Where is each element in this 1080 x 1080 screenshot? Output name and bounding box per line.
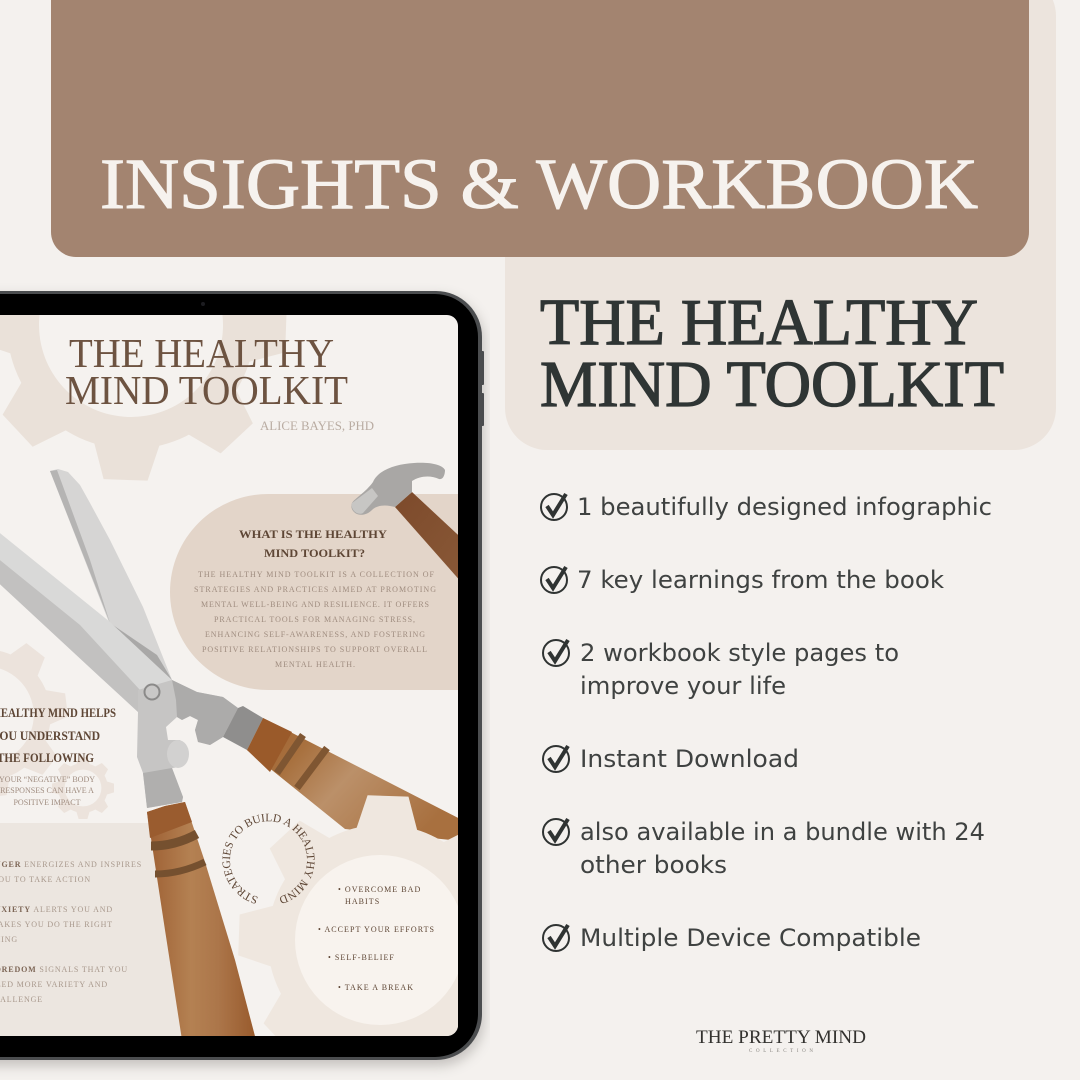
- shears grip collar: [143, 768, 183, 808]
- shears lower blade: [0, 525, 172, 715]
- left subheading: YOUR “NEGATIVE” BODY: [0, 775, 95, 784]
- banner heading: INSIGHTS & WORKBOOK: [100, 144, 978, 224]
- pill body text: THE HEALTHY MIND TOOLKIT IS A COLLECTION OF: [198, 570, 435, 579]
- pill body text: STRATEGIES AND PRACTICES AIMED AT PROMOTING: [194, 585, 436, 594]
- strategies list: [318, 885, 435, 992]
- illustration: shears: [0, 469, 470, 1040]
- pill body text: POSITIVE RELATIONSHIPS TO SUPPORT OVERALL: [202, 645, 427, 654]
- shears ferrule: [223, 706, 263, 750]
- checklist: [541, 493, 992, 952]
- strategies list: • OVERCOME BAD: [338, 885, 421, 894]
- left gear: [0, 643, 68, 796]
- lower right gear: [238, 795, 458, 1036]
- tablet camera: [201, 302, 205, 306]
- item 3: [543, 639, 899, 700]
- tablet screen: [0, 315, 458, 1036]
- shears upper blade: [50, 469, 172, 695]
- pill heading: [239, 530, 387, 557]
- left heading: [0, 706, 116, 765]
- logo: COLLECTION: [749, 1049, 813, 1054]
- gear inner circle: [295, 855, 465, 1025]
- item 3: 2 workbook style pages to: [580, 639, 899, 667]
- screen title: MIND TOOLKIT: [65, 367, 348, 413]
- screen title: [66, 340, 348, 405]
- item 5: also available in a bundle with 24: [580, 818, 985, 846]
- pill body text: MENTAL WELL-BEING AND RESILIENCE. IT OFFERS: [201, 600, 429, 609]
- heading: the healthy mind toolkit: THE HEALTHY: [540, 286, 978, 359]
- heading: the healthy mind toolkit: MIND TOOLKIT: [540, 348, 1004, 421]
- emotions text: [0, 860, 142, 1004]
- left heading: THE FOLLOWING: [0, 751, 94, 765]
- item 4: Instant Download: [580, 745, 799, 773]
- curved heading: strategies: STRATEGIES TO BUILD A HEALTHY MIND: [222, 814, 315, 904]
- tablet side buttons: [480, 351, 484, 426]
- left subheading: RESPONSES CAN HAVE A: [0, 786, 94, 795]
- pill body text: PRACTICAL TOOLS FOR MANAGING STRESS,: [214, 615, 415, 624]
- shears right handle: [247, 718, 470, 842]
- panel: lower left emotions: [0, 823, 190, 1036]
- tablet shadow: [0, 296, 484, 1066]
- strategies list: • ACCEPT YOUR EFFORTS: [318, 925, 435, 934]
- shears pivot pin: [144, 684, 160, 700]
- banner: [51, 0, 1029, 257]
- strategies list: • TAKE A BREAK: [338, 983, 414, 992]
- panel: what is the toolkit pill: [170, 494, 470, 690]
- screen title: THE HEALTHY: [69, 330, 334, 376]
- left subheading: [0, 776, 95, 805]
- strategies list: HABITS: [345, 897, 380, 906]
- left subheading: POSITIVE IMPACT: [13, 798, 81, 807]
- item 2: 7 key learnings from the book: [577, 566, 944, 594]
- shears knob: [167, 740, 189, 768]
- pill body text: [194, 570, 436, 669]
- heading: the healthy mind toolkit: [540, 286, 1004, 421]
- item 5: other books: [580, 851, 727, 879]
- screen author: ALICE BAYES, PHD: [260, 418, 374, 433]
- shears lower handle: [147, 802, 256, 1040]
- large gear: [0, 315, 286, 480]
- logo: THE PRETTY MIND: [696, 1027, 866, 1048]
- tablet bezel: [0, 294, 478, 1057]
- small gear: [52, 757, 114, 819]
- item 1: 1 beautifully designed infographic: [577, 493, 992, 521]
- pill heading: MIND TOOLKIT?: [264, 546, 365, 560]
- panel: product title backing: [505, 0, 1056, 450]
- strategies list: • SELF-BELIEF: [328, 953, 395, 962]
- pill heading: WHAT IS THE HEALTHY: [239, 527, 387, 541]
- tablet body: [0, 291, 482, 1060]
- item 6: Multiple Device Compatible: [580, 924, 921, 952]
- item 5: [543, 818, 985, 879]
- tablet mockup: [0, 290, 490, 1072]
- icon: hammer: [351, 462, 458, 578]
- item 3: improve your life: [580, 672, 786, 700]
- pill body text: ENHANCING SELF-AWARENESS, AND FOSTERING: [205, 630, 425, 639]
- shears pivot body: [137, 680, 263, 808]
- pill body text: MENTAL HEALTH.: [275, 660, 355, 669]
